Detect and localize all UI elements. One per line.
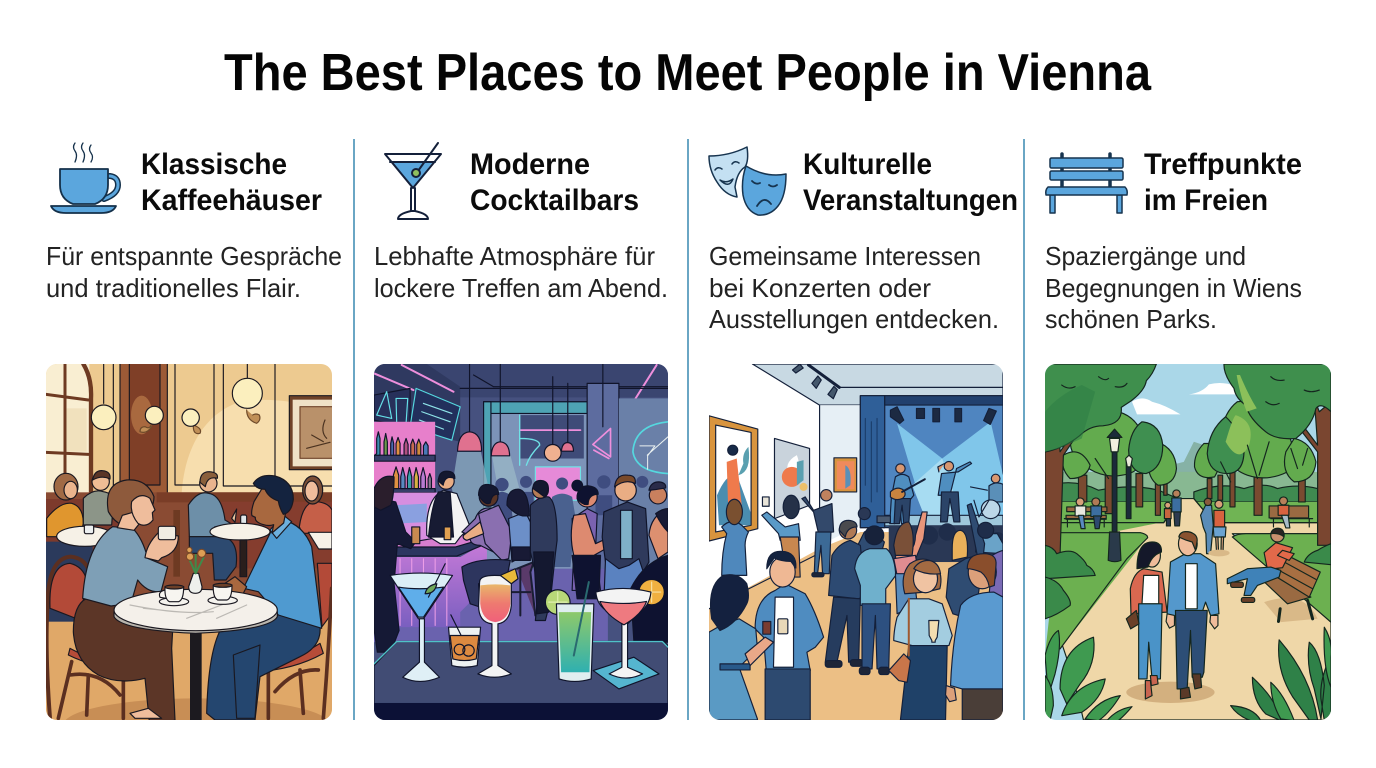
heading (1144, 148, 1302, 217)
bushes (1045, 545, 1095, 579)
illustration: gallery and concert (709, 364, 1003, 720)
table (190, 630, 202, 720)
text block (374, 241, 668, 303)
path (1058, 499, 1331, 720)
heading (470, 148, 639, 217)
benches and far people (1064, 507, 1107, 527)
icon: martini glass (384, 142, 442, 220)
big trees (1045, 395, 1102, 555)
heading (141, 148, 322, 217)
panel: Kulturelle Veranstaltungen (708, 146, 1018, 720)
standing man dark (530, 497, 557, 620)
divider (353, 139, 355, 720)
woman foreground (73, 598, 175, 728)
girl sitting (509, 512, 532, 562)
text block: Für entspannte Gespräche (46, 241, 342, 271)
heading: im Freien (1144, 184, 1268, 217)
heading (803, 148, 1018, 217)
raised arm women (895, 512, 927, 574)
performers (890, 474, 914, 524)
divider (687, 139, 689, 720)
heading: Kaffeehäuser (141, 184, 322, 217)
back room (484, 402, 587, 575)
lamps (104, 364, 247, 403)
heading: Moderne (470, 148, 590, 181)
foreground woman left (709, 619, 757, 720)
background people (47, 503, 83, 537)
couple foreground (1126, 682, 1215, 703)
panel: Klassische Kaffeehäuser (46, 142, 342, 720)
man dark coat (829, 540, 865, 599)
text block: Lebhafte Atmosphäre für (374, 241, 655, 271)
panel: Treffpunkte im Freien (1045, 148, 1331, 720)
stage (860, 396, 1003, 528)
illustration: Viennese coffee house (46, 364, 332, 720)
text block (46, 241, 342, 303)
text block: bei Konzerten oder (709, 273, 931, 303)
heading: Treffpunkte (1144, 148, 1302, 181)
seated man (462, 508, 507, 559)
silhouettes (494, 475, 648, 567)
text block (1045, 241, 1302, 334)
illustration: city park (1045, 364, 1331, 720)
text block: lockere Treffen am Abend. (374, 273, 668, 303)
crowd back (889, 525, 1003, 562)
text block: Ausstellungen entdecken. (709, 304, 999, 334)
panel: Moderne Cocktailbars (374, 142, 668, 720)
illustration: cocktail bar (374, 364, 668, 720)
bench foreground with person (1264, 598, 1318, 622)
floor (709, 532, 1003, 720)
icon: park bench (1045, 152, 1128, 214)
divider (1023, 139, 1025, 720)
screens and shelves (374, 388, 410, 428)
left man dark (374, 501, 416, 652)
icon: theatre masks (708, 146, 787, 216)
man foreground (207, 610, 320, 720)
bartender (427, 490, 470, 544)
woman and man right (572, 509, 601, 590)
bar counter and floor (374, 569, 608, 642)
text block: Spaziergänge und (1045, 241, 1246, 271)
heading: Cocktailbars (470, 184, 639, 217)
mid trees (1078, 462, 1305, 515)
foreground man with jacket (755, 584, 824, 677)
cocktails (390, 573, 453, 619)
text block (709, 241, 999, 334)
text block: schönen Parks. (1045, 304, 1217, 334)
heading: Klassische (141, 148, 287, 181)
foreground plants (1045, 630, 1132, 722)
paintings (709, 416, 758, 541)
text block: Gemeinsame Interessen (709, 241, 981, 271)
text block: Begegnungen in Wiens (1045, 273, 1302, 303)
foreground table (374, 642, 668, 704)
flowers and chairs (47, 557, 91, 718)
icon: coffee cup (50, 142, 121, 214)
heading: Kulturelle (803, 148, 932, 181)
text block: und traditionelles Flair. (46, 273, 301, 303)
foreground man right (951, 592, 1003, 689)
lamp posts (1126, 462, 1131, 519)
lamps and beams (452, 452, 494, 529)
foreground woman with bag (894, 599, 952, 646)
gallery visitors (722, 522, 748, 575)
